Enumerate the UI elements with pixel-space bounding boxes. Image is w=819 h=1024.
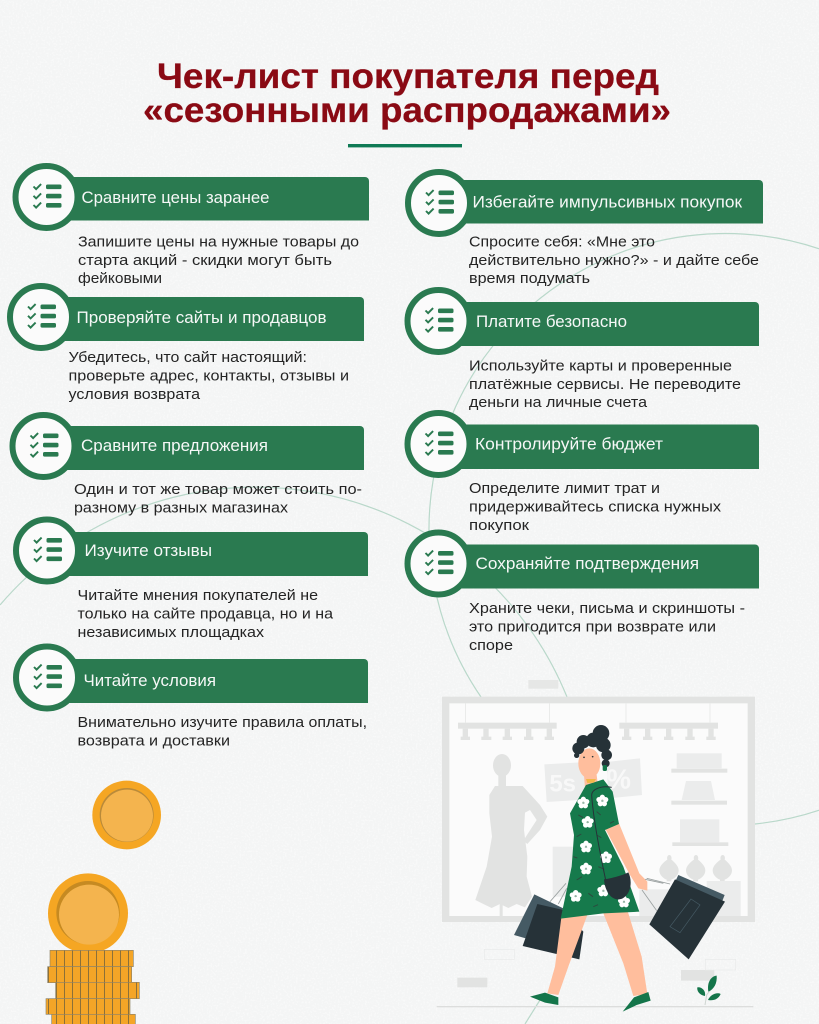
- plant: [697, 976, 721, 1005]
- icon: checklist: [12, 415, 74, 477]
- icon: checklist: [408, 532, 470, 594]
- body text: проверьте адрес, контакты, отзывы и: [68, 368, 349, 384]
- body text: покупок: [469, 517, 529, 534]
- body text: только на сайте продавца, но и на: [78, 606, 334, 622]
- store window: %: [607, 763, 631, 794]
- body text: независимых площадках: [78, 624, 265, 641]
- body text: разному в разных магазинах: [74, 500, 289, 516]
- falling coin: [92, 781, 161, 849]
- body text: Запишите цены на нужные товары до: [78, 234, 359, 250]
- body text: [469, 358, 741, 411]
- title: Чек-лист покупателя перед: [157, 56, 659, 96]
- left shopping bag: [514, 883, 583, 959]
- icon: checklist: [10, 286, 72, 348]
- body text: [469, 600, 745, 654]
- header bar: [439, 302, 759, 346]
- illustration: coins: [46, 781, 161, 1024]
- coin stack: [46, 950, 139, 1024]
- body text: Один и тот же товар может стоить по-: [74, 481, 362, 498]
- icon: checklist: [16, 520, 78, 582]
- header bar: [439, 544, 759, 588]
- heading: Платите безопасно: [476, 313, 627, 331]
- body text: [74, 481, 362, 516]
- heading: Сравните предложения: [81, 437, 268, 455]
- body text: споре: [469, 637, 513, 654]
- heading: Читайте условия: [84, 672, 216, 690]
- heading: Сохраняйте подтверждения: [476, 555, 699, 573]
- woman: [530, 725, 651, 1012]
- icon: checklist: [16, 166, 78, 228]
- body text: [68, 349, 349, 403]
- store window: [442, 680, 755, 922]
- body text: платёжные сервисы. Не переводите: [469, 376, 741, 393]
- body text: Внимательно изучите правила оплаты,: [78, 714, 367, 731]
- body text: Спросите себя: «Мне это: [469, 234, 655, 250]
- icon: checklist: [408, 172, 470, 234]
- panel: изучите отзывы: [16, 520, 368, 641]
- body text: действительно нужно?» - и дайте себе: [469, 252, 759, 269]
- body text: [469, 480, 722, 534]
- body text: Читайте мнения покупателей не: [78, 587, 318, 604]
- body text: это пригодится при возврате или: [469, 618, 716, 636]
- body text: возврата и доставки: [78, 732, 230, 750]
- body text: деньги на личные счета: [469, 394, 648, 411]
- heading: Избегайте импульсивных покупок: [472, 194, 743, 212]
- body text: старта акций - скидки могут быть: [78, 252, 332, 269]
- body text: условия возврата: [68, 386, 201, 403]
- body text: фейковыми: [78, 270, 162, 287]
- icon: checklist: [16, 646, 78, 708]
- panel: контролируйте бюджет: [408, 413, 759, 534]
- panel: сохраняйте подтверждения: [408, 532, 759, 654]
- header bar: [47, 532, 368, 576]
- header bar: [439, 180, 763, 224]
- illustration: woman shopping in front of store window: [437, 680, 755, 1012]
- body text: Убедитесь, что сайт настоящий:: [68, 349, 307, 366]
- heading: Сравните цены заранее: [82, 189, 270, 207]
- title: «сезонными распродажами»: [143, 90, 671, 130]
- panel: сравните предложения: [12, 415, 364, 516]
- body text: Храните чеки, письма и скриншоты -: [469, 600, 745, 617]
- icon: checklist: [408, 413, 470, 475]
- body text: [469, 234, 759, 287]
- body text: [78, 234, 359, 287]
- header bar: [46, 177, 369, 220]
- body text: Определите лимит трат и: [469, 480, 660, 497]
- body text: время подумать: [469, 270, 590, 287]
- top coin on stack: [48, 873, 128, 953]
- header bar: [41, 297, 364, 341]
- body text: [78, 714, 367, 750]
- header bar: [47, 659, 368, 703]
- panel: сравните цены заранее: [16, 166, 369, 287]
- icon: checklist: [408, 290, 470, 352]
- heading: Проверяйте сайты и продавцов: [76, 309, 327, 327]
- right shopping bag: [642, 875, 725, 959]
- heading: Контролируйте бюджет: [475, 436, 663, 454]
- panel: проверяйте сайты и продавцов: [10, 286, 364, 403]
- header bar: [44, 426, 364, 470]
- body text: Используйте карты и проверенные: [469, 358, 732, 374]
- panel: избегайте импульсивных покупок: [408, 172, 763, 287]
- floor details: [437, 949, 753, 1007]
- heading: Изучите отзывы: [84, 542, 212, 560]
- title: [143, 56, 671, 130]
- body text: [78, 587, 334, 641]
- store window: 5s: [549, 771, 576, 798]
- header bar: [439, 424, 759, 469]
- panel: читайте условия: [16, 646, 368, 750]
- title underline: [348, 144, 462, 147]
- panel: платите безопасно: [408, 290, 759, 411]
- body text: придерживайтесь списка нужных: [469, 498, 722, 516]
